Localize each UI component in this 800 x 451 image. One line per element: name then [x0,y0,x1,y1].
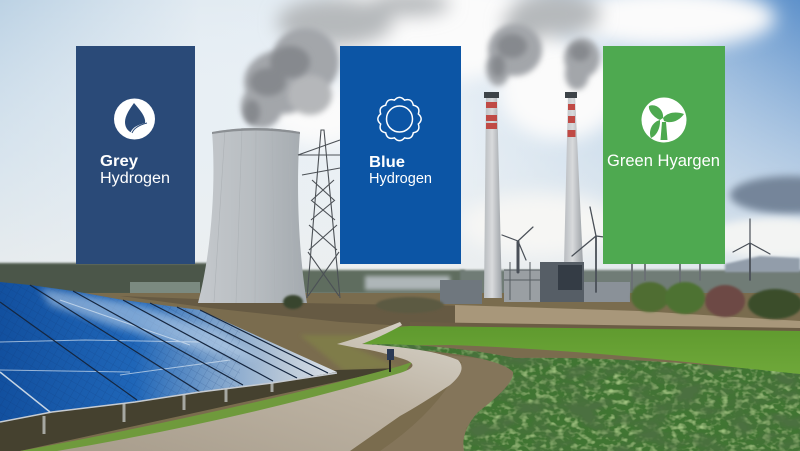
icon: wind turbine leaves [642,98,686,142]
label: blue hydrogen: Blue [369,154,405,171]
ground beneath the solar array [0,368,400,451]
solar panel array [0,280,337,434]
label: blue hydrogen [369,154,432,187]
label: blue hydrogen: Hydrogen [369,170,432,187]
distant treeline [0,256,800,300]
label: grey hydrogen [100,153,170,187]
icon: gear outline [378,97,421,141]
industrial plant buildings [440,262,630,304]
label: grey hydrogen: Grey [100,153,138,170]
road marker post [387,349,394,372]
label: grey hydrogen: Hydrogen [100,170,170,187]
roadside shrubs [283,282,800,319]
label: green hydrogen: Green Hyargen [607,152,720,170]
wind turbines [502,207,770,292]
ground and dry field [0,293,800,451]
green meadow [362,326,800,375]
grass verge [20,362,412,451]
background sky [0,0,800,300]
icon: water drop and leaf [114,98,155,140]
power plant chimneys [484,92,583,298]
cooling tower [198,128,307,303]
panel: green hydrogen [603,46,725,264]
crop field [372,344,800,451]
field verge [380,350,513,451]
winding road [57,322,462,451]
transmission pylon [298,130,340,298]
smoke plumes [241,0,775,145]
panel: grey hydrogen [76,46,195,264]
panel: blue hydrogen [340,46,461,264]
